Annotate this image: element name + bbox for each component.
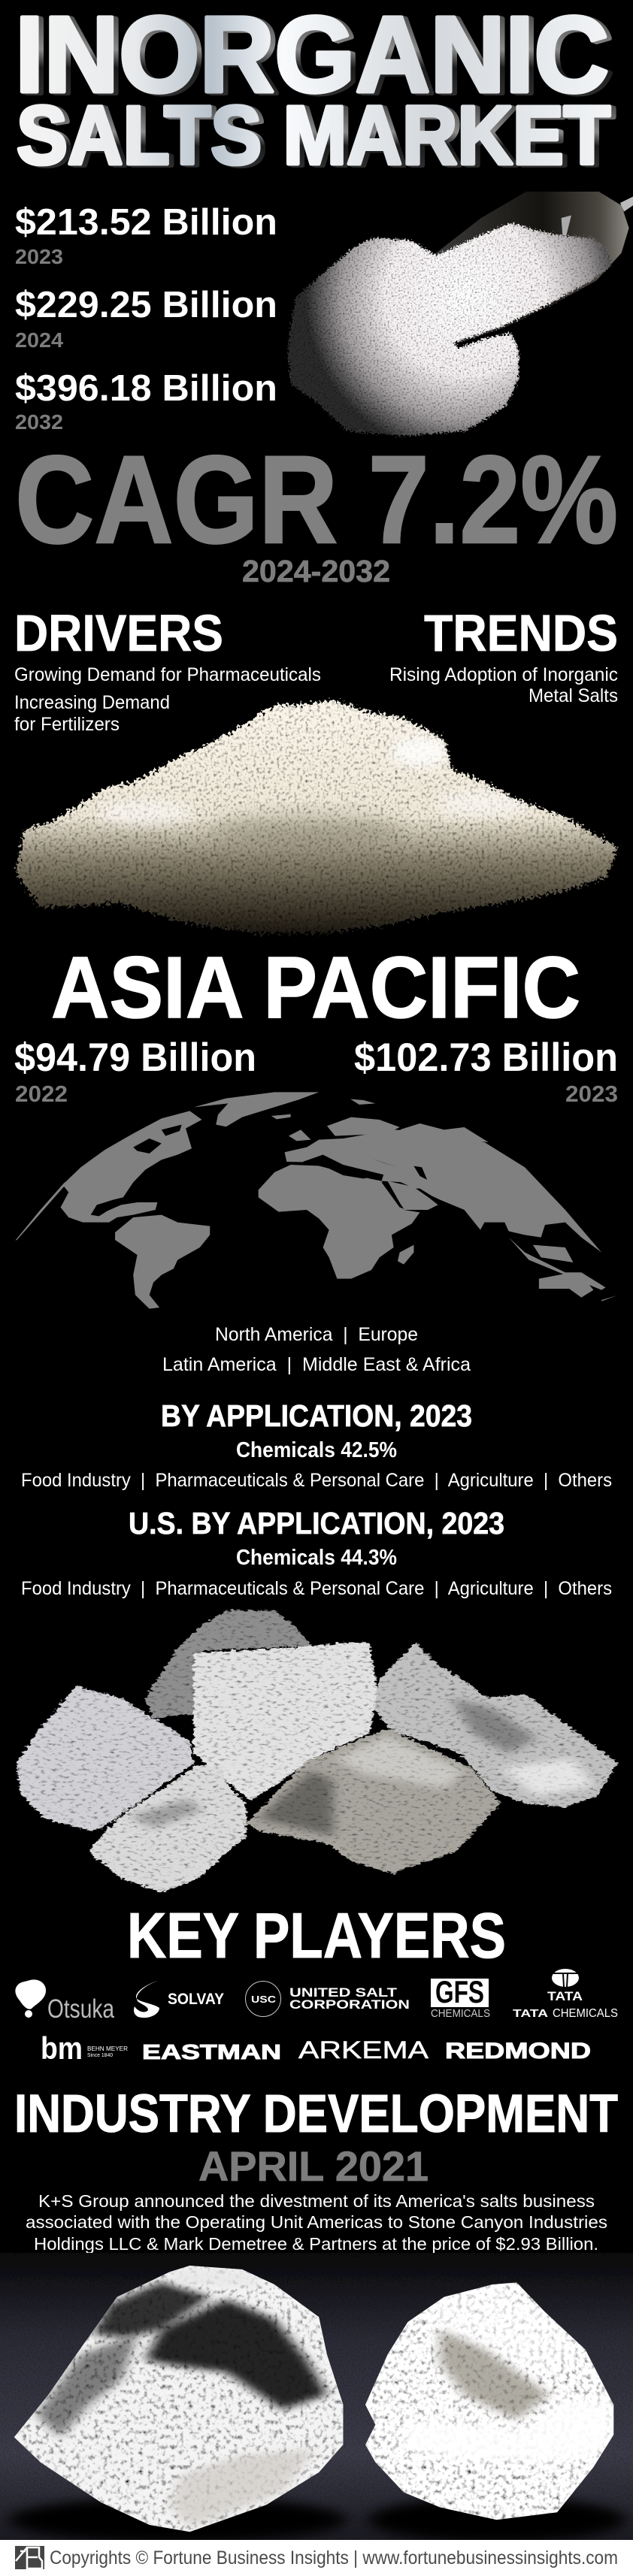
section: U.S. by application: U.S. BY APPLICATION, 2023	[129, 1506, 504, 1540]
panel: trends	[389, 604, 618, 706]
logo: Tata Chemicals	[513, 1969, 618, 2020]
illustration: salt rocks	[16, 1610, 618, 1892]
heading: Asia Pacific: ASIA PACIFIC	[51, 939, 580, 1036]
logo: Solvay: SOLVAY	[168, 1991, 224, 2008]
regional values	[14, 1036, 618, 1107]
logo: United Salt Corporation: USC	[251, 1994, 277, 2005]
panel: trends: Metal Salts	[529, 685, 618, 706]
regional values: 2023	[565, 1081, 618, 1107]
logo: United Salt Corporation: UNITED SALT	[289, 1985, 398, 2000]
logo: Tata Chemicals: CHEMICALS	[553, 2007, 618, 2020]
logo: Behn Meyer: bm	[41, 2030, 83, 2066]
panel: drivers: DRIVERS	[14, 604, 223, 662]
regional values: $102.73 Billion	[354, 1036, 618, 1080]
icon: Fortune Business Insights logo	[15, 2546, 44, 2569]
logo: Behn Meyer: BEHN MEYER	[87, 2045, 128, 2052]
paragraph: industry development: K+S Group announced the divestment of its America's salts business	[38, 2191, 595, 2211]
title	[15, 0, 615, 183]
logo: GFS Chemicals: GFS	[435, 1974, 484, 2009]
paragraph: industry development	[26, 2191, 607, 2254]
paragraph: industry development: associated with the Operating Unit Americas to Stone Canyon Industries	[26, 2212, 607, 2232]
logo: United Salt Corporation: CORPORATION	[289, 1997, 410, 2012]
panel: drivers: Growing Demand for Pharmaceuticals	[14, 664, 321, 685]
panel: drivers: Increasing Demand	[14, 692, 170, 713]
logo: GFS Chemicals: CHEMICALS	[431, 2007, 490, 2020]
panel: trends: Rising Adoption of Inorganic	[389, 664, 618, 685]
market value figures: 2024	[15, 328, 63, 352]
market value figures	[15, 202, 277, 434]
logo: Tata Chemicals: TATA	[513, 2007, 548, 2020]
heading: key players: KEY PLAYERS	[127, 1900, 506, 1972]
market value figures: 2032	[15, 410, 63, 434]
panel: drivers	[14, 604, 321, 735]
CAGR: 2024-2032	[242, 554, 390, 588]
regional values: 2022	[15, 1081, 68, 1107]
logo: Otsuka: Otsuka	[47, 1994, 114, 2024]
logo: Eastman: EASTMAN	[142, 2040, 281, 2064]
other regions list	[162, 1324, 471, 1375]
section: by application: Food Industry | Pharmaceuticals & Personal Care | Agriculture | Others	[21, 1470, 612, 1491]
regional values: $94.79 Billion	[14, 1036, 256, 1080]
section: by application: Chemicals 42.5%	[236, 1438, 397, 1462]
other regions list: North America | Europe	[215, 1324, 418, 1345]
paragraph: industry development: Holdings LLC & Mark Demetree & Partners at the price of $2.93 Billion.	[34, 2234, 598, 2254]
logo: Behn Meyer	[41, 2030, 128, 2066]
logo: Arkema: ARKEMA	[298, 2036, 429, 2064]
illustration: salt scoop	[288, 192, 633, 436]
logo: Solvay	[134, 1981, 224, 2018]
other regions list: Latin America | Middle East & Africa	[162, 1354, 471, 1375]
market value figures: $229.25 Billion	[15, 285, 277, 325]
market value figures: 2023	[15, 245, 63, 268]
panel: trends: TRENDS	[424, 604, 618, 662]
world map globe	[15, 1092, 617, 1309]
illustration: salt pile	[16, 700, 618, 933]
section: U.S. by application	[21, 1506, 612, 1599]
section: by application: BY APPLICATION, 2023	[161, 1398, 472, 1433]
section: U.S. by application: Chemicals 44.3%	[236, 1546, 397, 1570]
section: by application	[21, 1398, 612, 1491]
market value figures: $213.52 Billion	[15, 202, 277, 243]
logo: Tata Chemicals: TATA	[547, 1989, 583, 2003]
photo: raw crystals	[0, 2253, 633, 2542]
date: April 2021: APRIL 2021	[198, 2142, 429, 2190]
logo: Otsuka	[15, 1979, 114, 2024]
footer bar	[0, 2540, 633, 2576]
logo: GFS Chemicals	[431, 1974, 490, 2020]
logo: United Salt Corporation	[245, 1981, 410, 2017]
section: U.S. by application: Food Industry | Pharmaceuticals & Personal Care | Agriculture | Others	[21, 1578, 612, 1599]
logo: Redmond: REDMOND	[445, 2039, 591, 2064]
logos: key players	[15, 1969, 618, 2066]
market value figures: $396.18 Billion	[15, 368, 277, 409]
panel: drivers: for Fertilizers	[14, 714, 120, 735]
logo: Behn Meyer: Since 1840	[87, 2053, 113, 2058]
